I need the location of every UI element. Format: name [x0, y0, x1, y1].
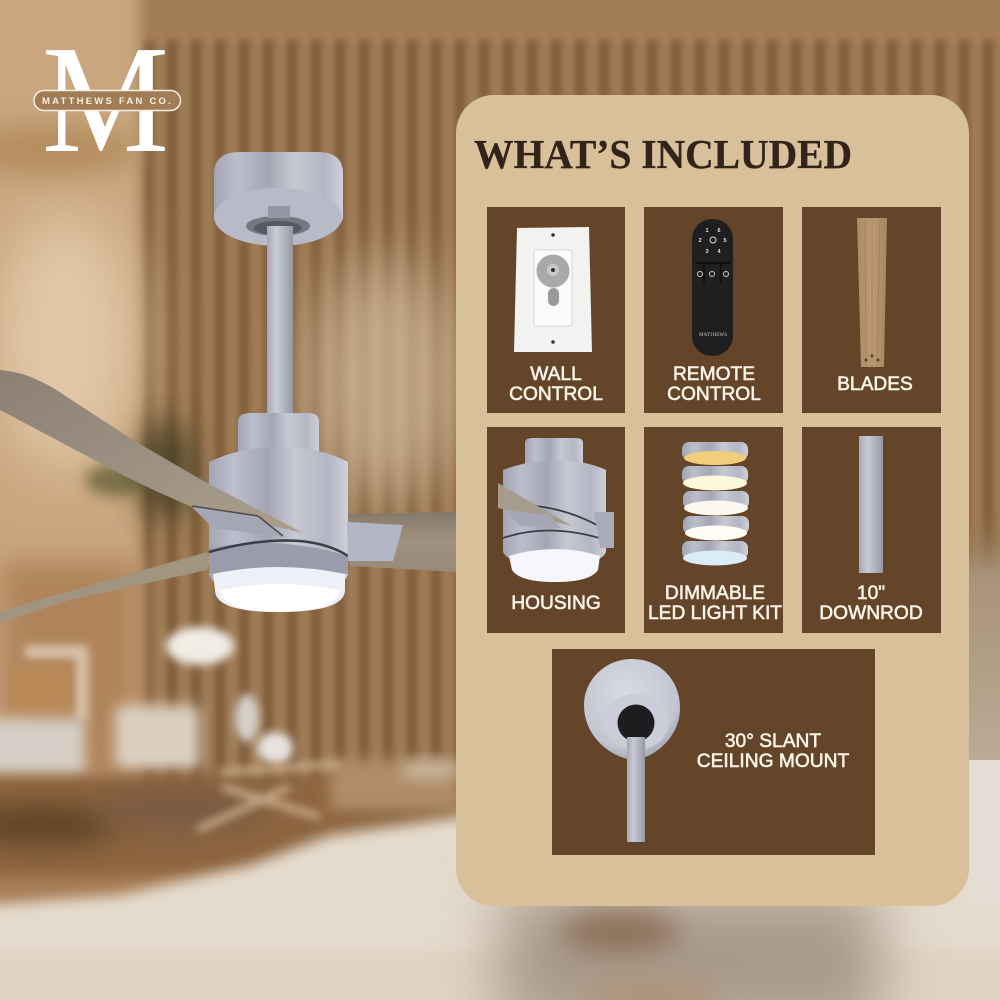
tile: remote control [644, 207, 783, 413]
fan blade: upper left [0, 370, 303, 533]
tile: 30 degree slant ceiling mount [552, 649, 875, 855]
icon: remote control: 3 [705, 249, 709, 255]
icon: downrod [859, 436, 883, 573]
icon: slant mount [584, 659, 680, 842]
fan blade: right [343, 512, 456, 572]
icon: remote control: MATTHEWS [699, 333, 727, 338]
label [667, 364, 761, 405]
tile: wall control [487, 207, 625, 413]
label: BLADES [837, 374, 913, 395]
label: LED LIGHT KIT [648, 603, 782, 624]
label [819, 583, 923, 624]
tile: housing [487, 427, 625, 633]
icon: remote control: 1 [705, 228, 709, 234]
icon: blade [857, 218, 887, 367]
disc: soft [682, 466, 748, 490]
icon: remote control: 6 [717, 228, 721, 234]
label: CEILING MOUNT [697, 751, 849, 772]
icon: LED light discs [682, 442, 749, 566]
icon: housing [498, 438, 614, 582]
label: DIMMABLE [665, 583, 765, 604]
logo: Matthews Fan Co.: MATTHEWS FAN CO. [42, 96, 172, 107]
icon: remote control: 2 [698, 238, 702, 244]
icon: remote control: 4 [717, 249, 721, 255]
blade bracket: right [347, 522, 403, 561]
label [509, 364, 603, 405]
fan blade: lower left [0, 552, 210, 623]
icon: remote control: 5 [723, 238, 727, 244]
label: 30° SLANT [725, 731, 821, 752]
ceiling fan photo [0, 152, 456, 623]
disc: cool [683, 516, 749, 540]
label: DOWNROD [819, 603, 923, 624]
label: HOUSING [511, 593, 601, 614]
motor housing [209, 413, 348, 612]
downrod [267, 226, 293, 414]
label: REMOTE [673, 364, 755, 385]
canopy [214, 152, 343, 246]
logo: Matthews Fan Co.: M [42, 15, 169, 185]
tile: blades [802, 207, 941, 413]
panel: what's included [456, 95, 969, 906]
label [648, 583, 782, 624]
icon: remote control [692, 219, 733, 356]
title: WHAT’S INCLUDED [474, 131, 852, 177]
label: CONTROL [509, 384, 603, 405]
blurred furniture [0, 627, 293, 778]
label: 10" [857, 583, 885, 604]
disc: natural [683, 491, 749, 516]
tile: 10 inch downrod [802, 427, 941, 633]
label: CONTROL [667, 384, 761, 405]
tile: dimmable LED light kit [644, 427, 783, 633]
disc: warm [682, 442, 748, 465]
label [697, 731, 849, 772]
disc: daylight [682, 541, 748, 566]
label: WALL [530, 364, 582, 385]
icon: wall control [514, 227, 592, 352]
